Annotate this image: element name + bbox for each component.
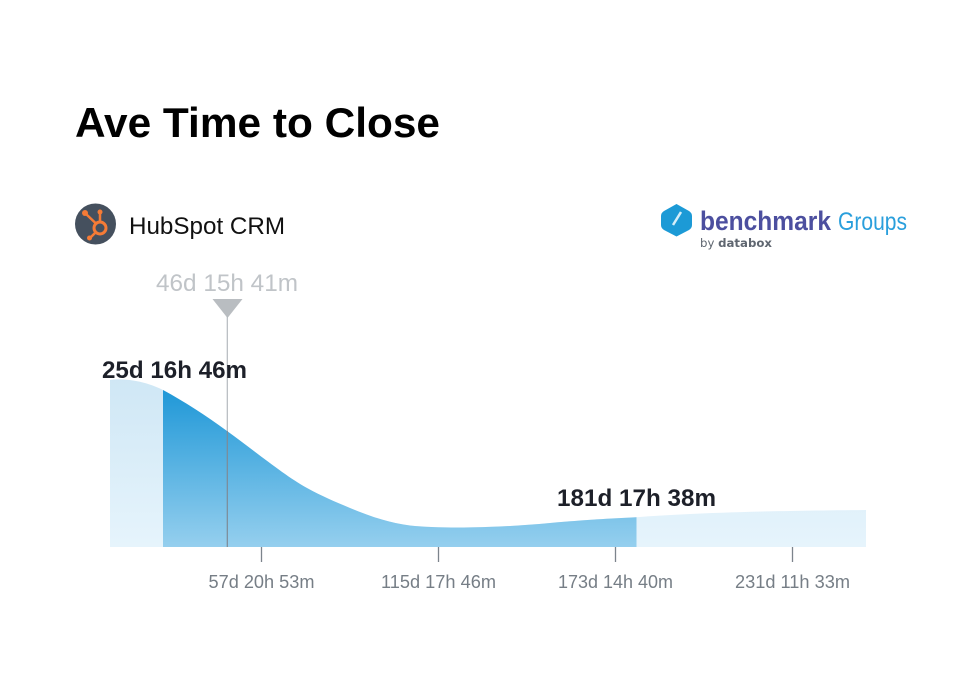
icon: HubSpot logo (75, 204, 116, 244)
marker triangle (212, 299, 242, 318)
logo wordmark second part: Groups (838, 208, 907, 236)
legend: HubSpot CRM (75, 204, 285, 244)
icon: blue hexagon (661, 204, 692, 236)
label: upper value: 181d 17h 38m (557, 485, 716, 512)
logo: benchmark Groups by databox (661, 204, 907, 250)
highlighted area between 25d and 181d (163, 390, 636, 547)
tick 4 (735, 547, 850, 592)
tick 2: 115d 17h 46m (381, 572, 496, 592)
x axis (208, 547, 850, 592)
tick 3 (558, 547, 673, 592)
tick 4: 231d 11h 33m (735, 572, 850, 592)
marker value: 46d 15h 41m (156, 270, 298, 297)
logo wordmark: benchmark (700, 206, 832, 236)
light distribution area (110, 379, 866, 547)
tick 1 (208, 547, 314, 592)
legend label: HubSpot CRM (129, 213, 285, 240)
label: lower value: 25d 16h 46m (102, 357, 247, 384)
tick 3: 173d 14h 40m (558, 572, 673, 592)
title: Ave Time to Close (75, 99, 440, 146)
area chart (110, 379, 866, 547)
tick 2 (381, 547, 496, 592)
logo byline: by databox (700, 236, 773, 250)
benchmark marker (156, 270, 298, 547)
tick 1: 57d 20h 53m (208, 572, 314, 592)
marker line (226, 316, 228, 547)
